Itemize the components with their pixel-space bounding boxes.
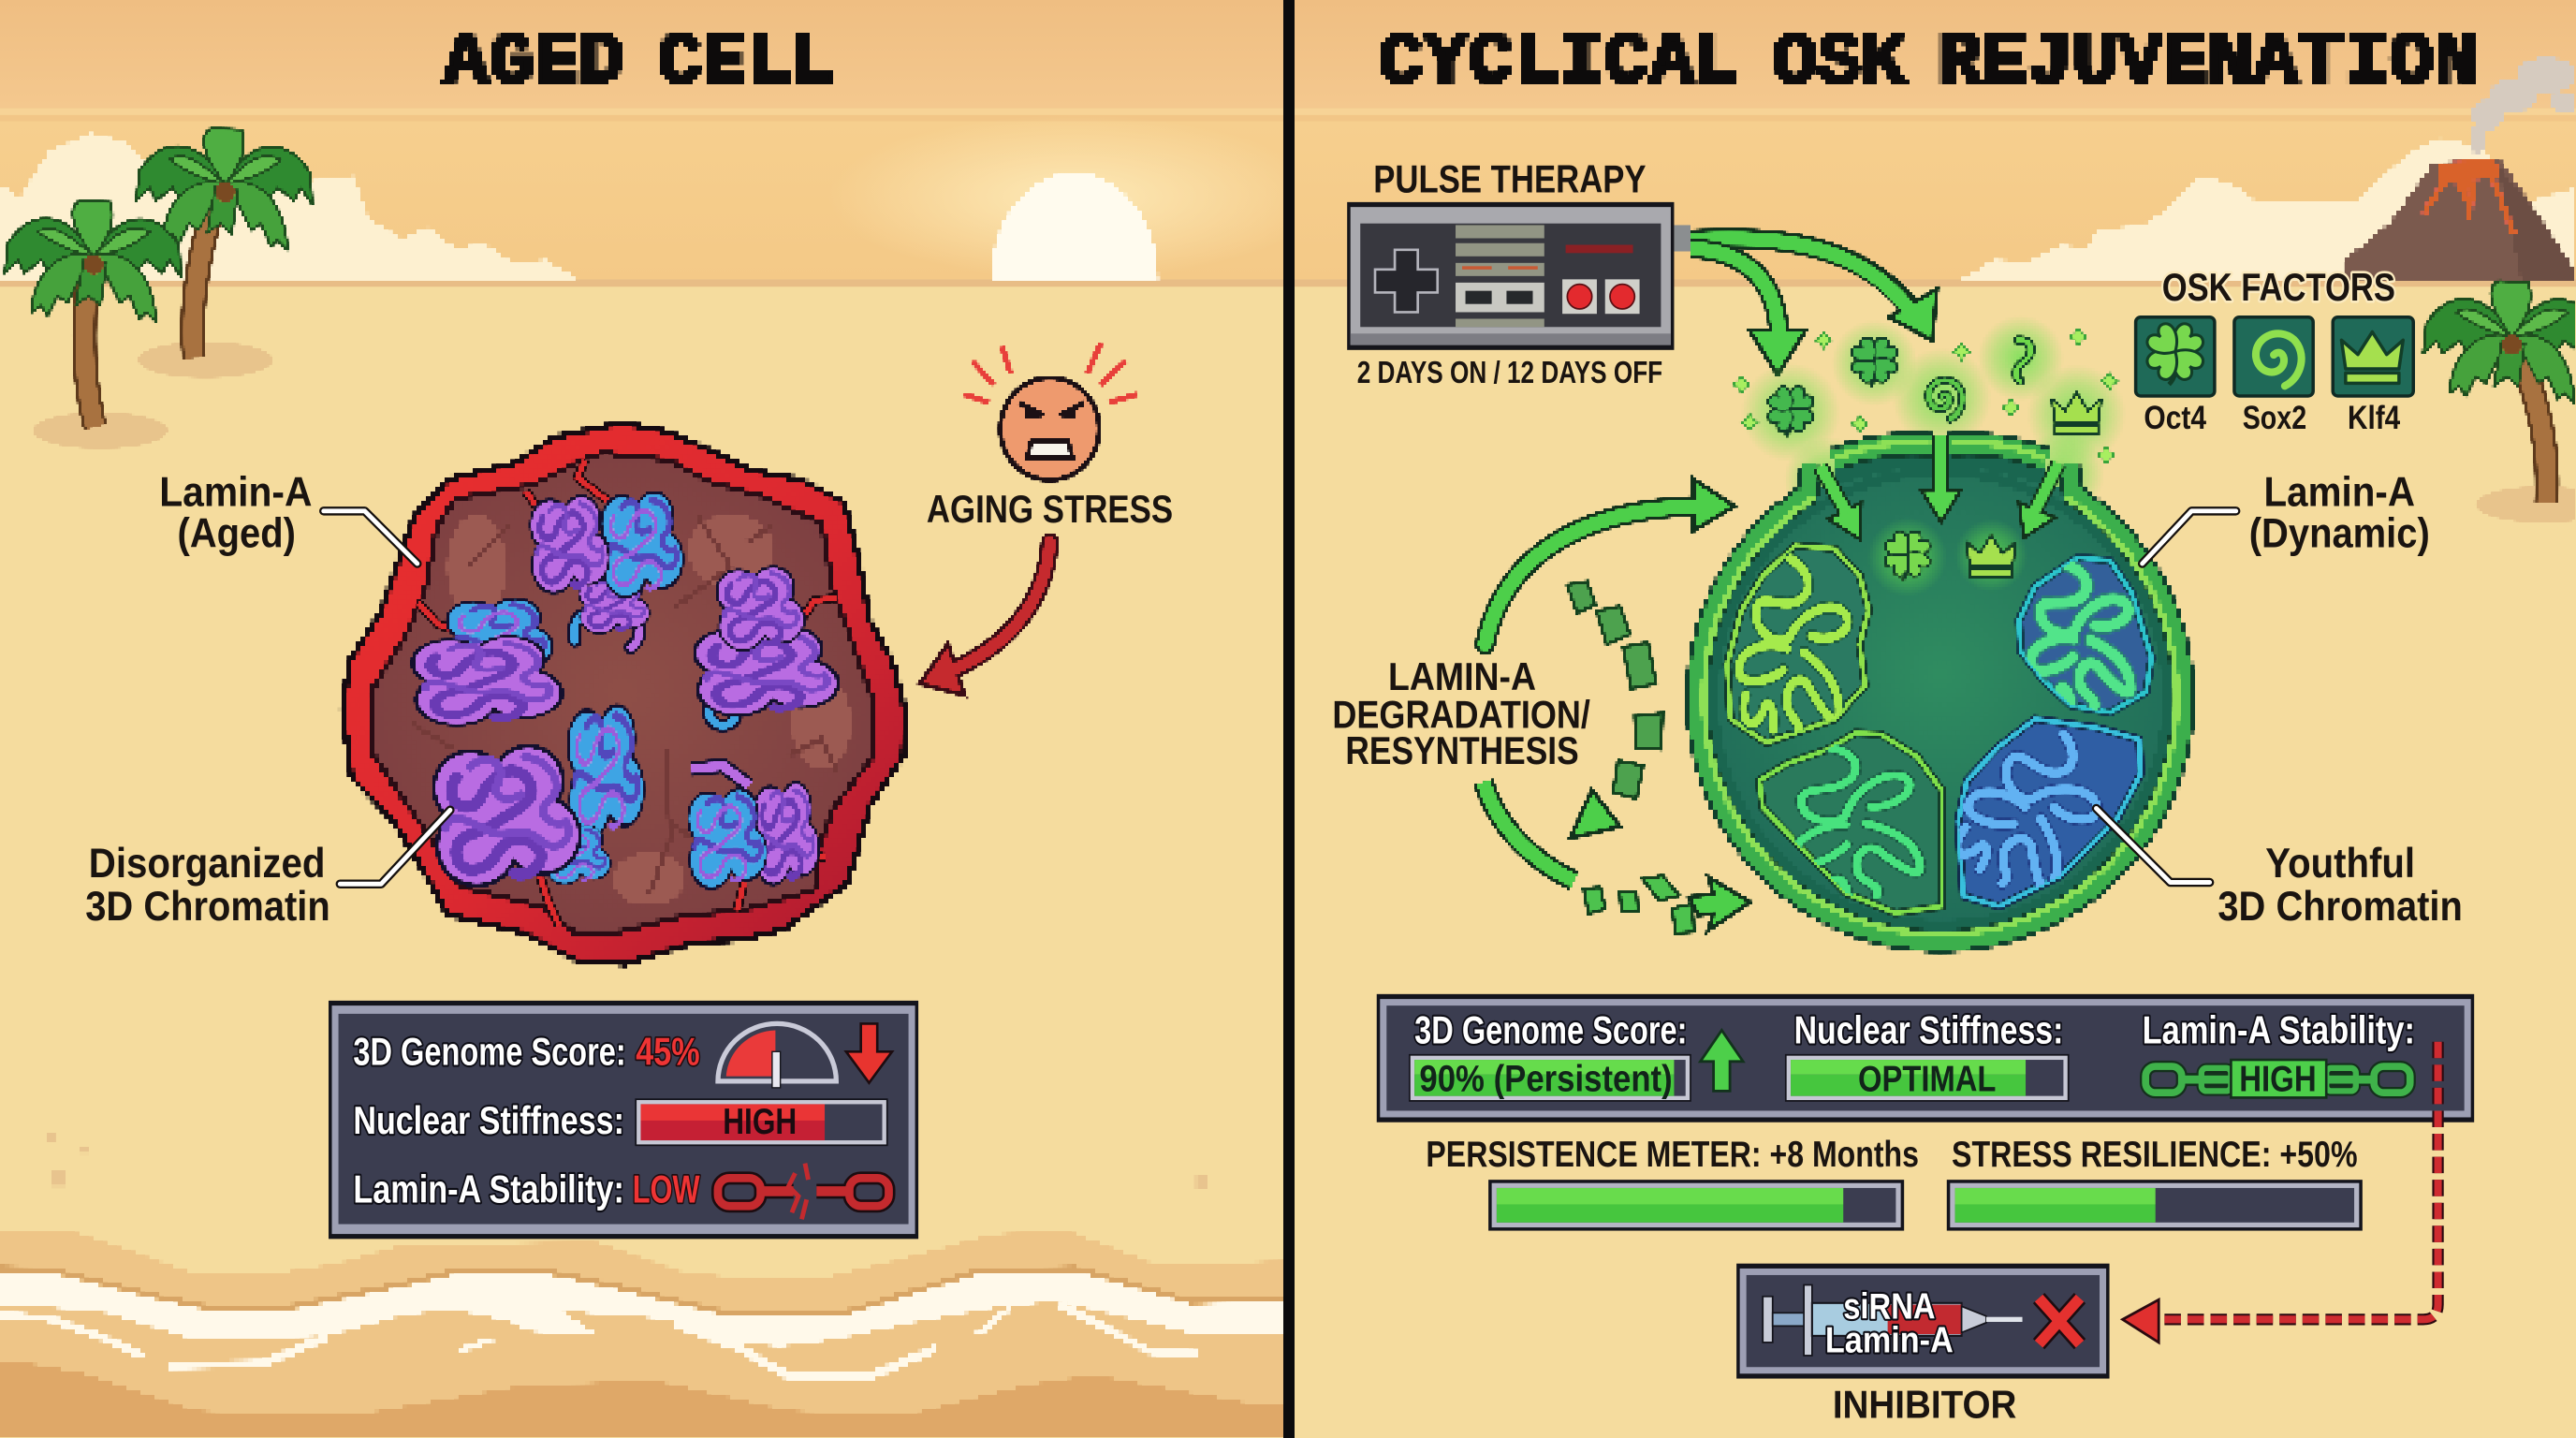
- chromatin cluster: left: [415, 600, 560, 724]
- a and b buttons: [1562, 245, 1640, 314]
- arrowhead: degradation: [1571, 790, 1620, 838]
- label: youthful 3d chromatin with leader: [2097, 809, 2463, 930]
- metric: lamin-a stability high: [2143, 1007, 2415, 1099]
- background: right sky and sand: [1295, 0, 2576, 1438]
- divider between panels: [1283, 0, 1295, 1438]
- metric: lamin-a stability high: HIGH: [2239, 1059, 2317, 1099]
- title: cyclical osk rejuvenation: REJUVENATION: [1937, 22, 2479, 105]
- label: lamin-a aged with leader: [159, 469, 417, 564]
- nuclear envelope and interior: [343, 423, 905, 964]
- title: aged cell: AGED: [444, 22, 624, 105]
- icon: green up arrow: [1701, 1030, 1743, 1091]
- title: cyclical osk rejuvenation: OSK: [1773, 22, 1906, 105]
- label: youthful 3d chromatin with leader: Youthful: [2265, 840, 2415, 887]
- clouds, volcano and smoke: [1962, 57, 2576, 283]
- metric: nuclear stiffness optimal: OPTIMAL: [1858, 1059, 1996, 1099]
- red lamin tendrils: [418, 460, 836, 925]
- panel: rejuvenated metrics hud: [1377, 994, 2474, 1123]
- icon: syringe: [1763, 1284, 2023, 1356]
- lamin fragments rebuilding: [1584, 875, 1694, 933]
- nucleus: aged cell: [343, 423, 905, 964]
- metric: lamin-a stability high: Lamin-A Stability:: [2143, 1007, 2415, 1051]
- floating osk factor particles: [1734, 315, 2126, 522]
- title: cyclical osk rejuvenation: [1379, 22, 2479, 105]
- label: youthful 3d chromatin with leader: 3D Chromatin: [2217, 883, 2463, 930]
- sun and clouds: [0, 133, 1158, 279]
- factor: klf4: [2333, 317, 2413, 436]
- chromatin cluster: right: [697, 568, 836, 726]
- metric: 3d genome score: 45%: [636, 1029, 700, 1073]
- title: aged cell: CELL: [657, 22, 836, 105]
- arrow: dashed red inhibition: [2123, 1042, 2438, 1343]
- metric: lamin-a stability: Lamin-A Stability:: [353, 1167, 624, 1211]
- inhibitor text: [1825, 1286, 1954, 1360]
- icon: red down arrow: [846, 1023, 892, 1083]
- shoreline waves: [0, 1134, 1288, 1438]
- chromatin domain: green: [1760, 729, 1942, 913]
- icon: palm trees: [5, 128, 312, 448]
- label: lamin-a dynamic with leader: (Dynamic): [2249, 509, 2430, 556]
- title: aged cell: [444, 22, 836, 105]
- metric: 3d genome score 90 percent: 3D Genome Score:: [1414, 1007, 1687, 1051]
- label: disorganized 3d chromatin with leader: [85, 810, 450, 930]
- cycle: lamin-a degradation and resynthesis arrows: [1484, 479, 1749, 933]
- metric: nuclear stiffness optimal: Nuclear Stiffness:: [1794, 1007, 2063, 1051]
- arrows: factors entering nucleus: [1821, 435, 2058, 539]
- meter: stress resilience: [1947, 1135, 2363, 1231]
- bar: stiffness high: [636, 1099, 887, 1145]
- label: aging stress: AGING STRESS: [927, 487, 1173, 531]
- background: left sky and sand: [0, 0, 1321, 1438]
- imported factors inside nucleus: [1868, 518, 2027, 596]
- nuclear membrane and interior: [1697, 443, 2184, 941]
- metric: lamin-a stability: LOW: [633, 1167, 700, 1211]
- inhibitor text: siRNA: [1843, 1286, 1936, 1327]
- icon: gauge at 45 percent: [718, 1023, 836, 1088]
- title: cyclical osk rejuvenation: CYCLICAL: [1379, 22, 1740, 105]
- label: lamin-a aged with leader: (Aged): [178, 509, 296, 556]
- bar: stiffness high: HIGH: [723, 1102, 797, 1142]
- icon: palm tree right: [2423, 281, 2576, 522]
- label: dosing schedule: 2 DAYS ON / 12 DAYS OFF: [1357, 356, 1662, 390]
- panel: inhibitor box: [1736, 1264, 2110, 1379]
- factor: sox2: [2234, 317, 2313, 436]
- chromatin domain: blue: [1944, 710, 2141, 907]
- label: lamin-a degradation resynthesis: LAMIN-A: [1388, 654, 1536, 698]
- inhibitor text: Lamin-A: [1825, 1320, 1954, 1360]
- label: lamin-a dynamic with leader: Lamin-A: [2264, 469, 2415, 516]
- chromatin cluster: top: [532, 494, 681, 648]
- panel: cyclical osk rejuvenation: [1295, 0, 2576, 1438]
- icon: broken chain: [718, 1164, 889, 1219]
- factor: sox2: Sox2: [2243, 400, 2306, 436]
- icon: game controller: [1347, 202, 1690, 350]
- panel: aged cell: [0, 0, 1321, 1438]
- lamin fragments descending: [1567, 581, 1662, 799]
- icon: angry stress face: [964, 344, 1137, 479]
- label: lamin-a degradation resynthesis: RESYNTHESIS: [1345, 728, 1579, 772]
- metric: nuclear stiffness optimal: [1786, 1007, 2069, 1101]
- arrowhead: into nucleus: [1689, 877, 1749, 930]
- label: inhibitor: INHIBITOR: [1833, 1383, 2016, 1427]
- arrow: degradation lower sweep: [1484, 782, 1573, 881]
- youthful chromatin domains: [1727, 546, 2151, 913]
- nucleus: rejuvenated cell: [1697, 435, 2184, 941]
- label: pulse therapy: PULSE THERAPY: [1373, 156, 1647, 200]
- meter: persistence: [1426, 1135, 1919, 1231]
- label: lamin-a degradation resynthesis: DEGRADATION/: [1332, 693, 1590, 737]
- factor: oct4: [2136, 317, 2215, 436]
- label: disorganized 3d chromatin with leader: 3D Chromatin: [85, 883, 330, 930]
- disorganized chromatin clusters: [415, 494, 836, 887]
- label: lamin-a aged with leader: Lamin-A: [159, 469, 312, 516]
- meter: stress resilience: STRESS RESILIENCE: +50%: [1952, 1135, 2358, 1175]
- factor: oct4: Oct4: [2144, 400, 2207, 436]
- label: disorganized 3d chromatin with leader: Disorganized: [89, 840, 326, 887]
- icon: red x: [2039, 1299, 2080, 1344]
- arrow: aging stress into nucleus: [920, 542, 1050, 695]
- arrows: controller pulses to factors: [1690, 239, 1937, 374]
- select and start buttons: [1456, 283, 1544, 312]
- chromatin cluster: lower left: [436, 708, 643, 884]
- panel: aged metrics hud: [329, 1001, 918, 1239]
- controller stripes: [1456, 225, 1544, 327]
- chromatin domain: teal: [2018, 557, 2151, 716]
- meter: persistence: PERSISTENCE METER: +8 Months: [1426, 1135, 1919, 1175]
- label: lamin-a dynamic with leader: [2143, 469, 2430, 564]
- metric: nuclear stiffness: Nuclear Stiffness:: [353, 1098, 624, 1142]
- arrow: resynthesis to nucleus: [1486, 479, 1734, 644]
- controller d-pad: [1375, 250, 1438, 312]
- metric: 3d genome score 90 percent: 90% (Persistent): [1419, 1058, 1673, 1099]
- chromatin cluster: lower right: [689, 766, 818, 887]
- metric: 3d genome score: 3D Genome Score:: [353, 1029, 626, 1073]
- label: osk factors: OSK FACTORS: [2162, 265, 2395, 309]
- metric: 3d genome score 90 percent: [1410, 1007, 1690, 1101]
- factor: klf4: Klf4: [2348, 400, 2401, 436]
- label: lamin-a degradation resynthesis: [1332, 654, 1590, 772]
- chromatin domain: lime: [1727, 546, 1868, 742]
